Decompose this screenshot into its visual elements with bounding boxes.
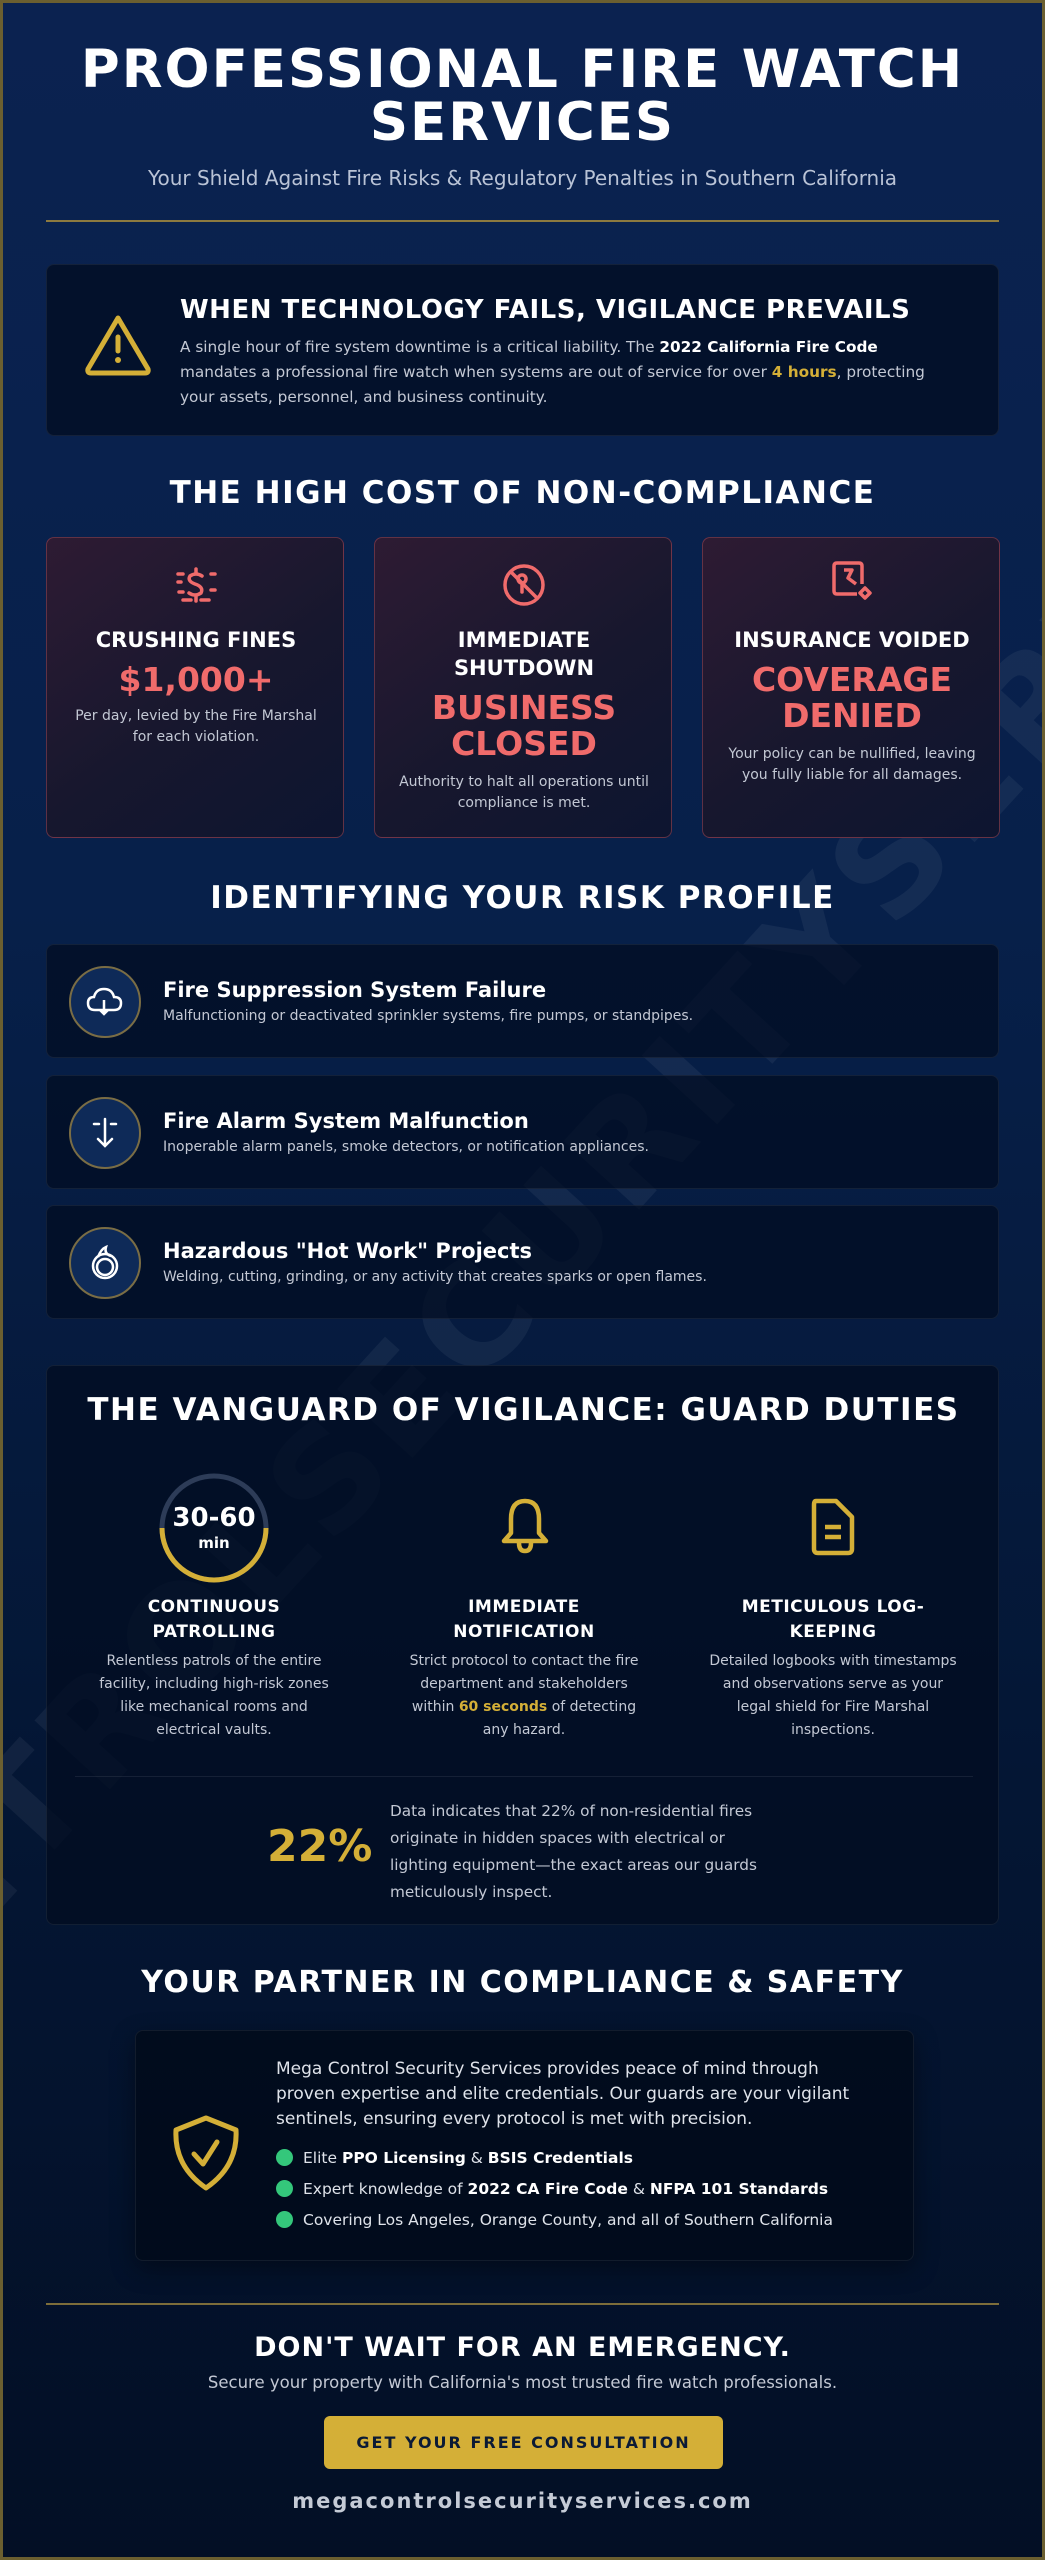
title: [81, 39, 964, 153]
stat text: Data indicates that 22% of non-residential fires originate in hidden spaces with electrical or lighting equipment—the exact areas our guards meticulously inspect.: [390, 1802, 757, 1901]
title: SERVICES: [370, 92, 675, 153]
card: insurance: DENIED: [782, 696, 922, 735]
icon: timer ring: [160, 1474, 268, 1582]
card: insurance: COVERAGE: [752, 660, 952, 699]
card: insurance: you fully liable for all damages.: [742, 767, 962, 783]
risk row: hot work: Hazardous "Hot Work" Projects: [163, 1239, 532, 1263]
risk row: suppression: [46, 944, 999, 1058]
icon: shield: [173, 2116, 239, 2190]
text: METICULOUS LOG-: [742, 1597, 924, 1617]
CTA subtext: Secure your property with California's most trusted fire watch professionals.: [208, 2373, 837, 2392]
text: Strict protocol to contact the fire department and stakeholders within 60 seconds of detecting any hazard.: [410, 1653, 638, 1738]
card: fines: $1,000+: [118, 660, 274, 699]
risk row: hot work: [46, 1205, 999, 1319]
card: shutdown: [374, 537, 672, 838]
card: fines: Per day, levied by the Fire Marshal: [75, 708, 317, 724]
text: Detailed logbooks with timestamps and observations serve as your legal shield for Fire Marshal inspections.: [709, 1653, 957, 1738]
icon: cloud: [69, 966, 141, 1038]
text: PATROLLING: [152, 1622, 276, 1642]
card: shutdown: CLOSED: [451, 724, 597, 763]
alert text: A single hour of fire system downtime is a critical liability. The 2022 California Fire Code mandates a professional fire watch when systems are out of service for over 4 hours, protecting your assets, personnel, and business continuity.: [180, 338, 925, 406]
website url: megacontrolsecurityservices.com: [292, 2489, 753, 2513]
risk row: suppression: Fire Suppression System Failure: [163, 978, 546, 1002]
risk row: alarm: [46, 1075, 999, 1189]
card: insurance: [702, 537, 1000, 838]
partner text: Mega Control Security Services provides peace of mind through proven expertise and elite credentials. Our guards are your vigilant sentinels, ensuring every protocol is met with precision.: [276, 2059, 849, 2129]
risk row: hot work: Welding, cutting, grinding, or any activity that creates sparks or open flames.: [163, 1269, 707, 1285]
CTA heading: DON'T WAIT FOR AN EMERGENCY.: [254, 2332, 791, 2363]
card: insurance: INSURANCE VOIDED: [734, 628, 970, 652]
text: Relentless patrols of the entire facility, including high-risk zones like mechanical rooms and electrical vaults.: [99, 1653, 329, 1738]
card: shutdown: SHUTDOWN: [454, 656, 594, 680]
card: shutdown: BUSINESS: [432, 688, 616, 727]
icon: document: [812, 1498, 854, 1556]
bullet list: Elite PPO Licensing & BSIS Credentials: [303, 2149, 633, 2167]
risk row: alarm: Fire Alarm System Malfunction: [163, 1109, 529, 1133]
title: PROFESSIONAL FIRE WATCH: [81, 39, 964, 100]
text: KEEPING: [790, 1622, 876, 1642]
card: fines: for each violation.: [133, 729, 259, 745]
bullet list: Expert knowledge of 2022 CA Fire Code & NFPA 101 Standards: [303, 2180, 828, 2198]
duty: notification: [410, 1498, 638, 1738]
subtitle: Your Shield Against Fire Risks & Regulatory Penalties in Southern California: [148, 166, 897, 190]
card: fines: [46, 537, 344, 838]
icon: flame: [69, 1227, 141, 1299]
text: CONTINUOUS: [148, 1597, 280, 1617]
heading: partner: YOUR PARTNER IN COMPLIANCE & SAFETY: [141, 1965, 904, 2000]
icon: no-entry: [503, 564, 545, 606]
panel: guard duties: [46, 1365, 999, 1925]
text: IMMEDIATE: [468, 1597, 580, 1617]
card: shutdown: compliance is met.: [458, 795, 590, 811]
panel: alert: [46, 264, 999, 436]
heading: cost: THE HIGH COST OF NON-COMPLIANCE: [170, 475, 875, 511]
risk row: suppression: Malfunctioning or deactivated sprinkler systems, fire pumps, or standpipes.: [163, 1008, 693, 1024]
card: shutdown: IMMEDIATE: [458, 628, 590, 652]
stat: 22%: 22%: [267, 1821, 372, 1872]
duty: patrolling: [99, 1474, 329, 1738]
icon: timer ring: min: [198, 1534, 230, 1552]
card: shutdown: Authority to halt all operations until: [399, 774, 649, 790]
text: NOTIFICATION: [453, 1622, 595, 1642]
heading: risk: IDENTIFYING YOUR RISK PROFILE: [210, 880, 835, 916]
icon: timer ring: 30-60: [172, 1503, 256, 1533]
alert heading: WHEN TECHNOLOGY FAILS, VIGILANCE PREVAILS: [180, 295, 910, 325]
icon: document broken: [832, 561, 872, 600]
button: GET YOUR FREE CONSULTATION: [356, 2433, 691, 2452]
icon: dollar: [176, 567, 217, 603]
panel: partner: [135, 2030, 914, 2261]
bullet list: Covering Los Angeles, Orange County, and all of Southern California: [303, 2211, 833, 2229]
duty: log-keeping: [709, 1498, 957, 1738]
icon: arrow down: [69, 1097, 141, 1169]
heading: duties: THE VANGUARD OF VIGILANCE: GUARD DUTIES: [87, 1392, 960, 1428]
icon: warning: [85, 316, 151, 376]
button: [324, 2416, 723, 2469]
card: insurance: Your policy can be nullified, leaving: [728, 746, 976, 762]
icon: bell: [502, 1498, 548, 1554]
risk row: alarm: Inoperable alarm panels, smoke detectors, or notification appliances.: [163, 1139, 649, 1155]
card: fines: CRUSHING FINES: [96, 628, 296, 652]
